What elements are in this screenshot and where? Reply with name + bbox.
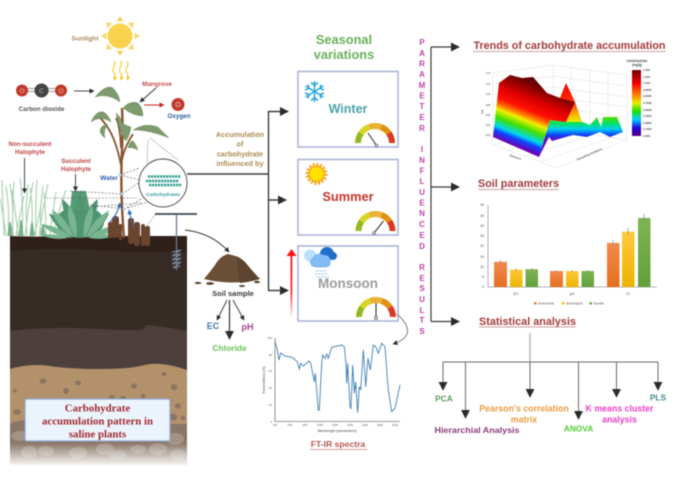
icon: carbon dioxide molecule: C [39, 88, 44, 95]
3D surface chart: 0.8 [486, 103, 490, 107]
surface: low right section [539, 117, 623, 157]
pearson label [479, 404, 569, 424]
title box: Carbohydrate [65, 402, 130, 414]
FT-IR chart: 20 [269, 403, 272, 407]
vertical text: parameter influenced results: A [419, 70, 425, 79]
non-succulent label: Non-succulent [9, 141, 51, 148]
color scale: 0.1400 [643, 127, 652, 131]
FT-IR chart: 800 [303, 423, 308, 427]
vertical text: parameter influenced results: T [420, 316, 425, 325]
stem [98, 108, 133, 238]
seasonal heading: Seasonal [316, 32, 372, 47]
title box: saline plants [69, 428, 126, 440]
vertical text: parameter influenced results: F [420, 166, 425, 176]
mangrove label: Mangrove [142, 81, 172, 88]
bar chart: soil parameters: 5 [482, 275, 484, 279]
3D surface chart: Seasons [509, 153, 522, 161]
legend: Avicennia [538, 302, 554, 306]
3D surface chart: 1.4 [486, 71, 490, 75]
gauge [358, 126, 392, 147]
icon: oxygen atom: O [175, 102, 181, 109]
carbohydrates magnifier: Carbohydrates [146, 192, 180, 198]
k means label [586, 404, 654, 424]
PLS label: PLS [650, 392, 667, 402]
vertical text: parameter influenced results: R [419, 263, 425, 272]
color scale: 0.7000 [643, 101, 652, 105]
seasonal heading: variations [314, 47, 374, 62]
color scale: 0.4200 [643, 114, 652, 118]
color scale: 0.5600 [643, 108, 652, 112]
color scale [627, 59, 652, 138]
3D surface chart: 0.4 [486, 123, 490, 127]
FT-IR chart: 1200 [332, 423, 339, 427]
color scale: 1.100 [643, 81, 650, 85]
icon: soil pile [194, 254, 260, 287]
accumulation label: of [237, 140, 244, 148]
3D surface chart: 0.2 [486, 133, 490, 137]
bar chart: soil parameters: 15 [480, 255, 484, 259]
FT-IR chart: 0 [270, 420, 272, 424]
FT-IR chart: 1800 [377, 423, 384, 427]
non-succulent label [9, 141, 51, 156]
k means label: analysis [602, 414, 637, 424]
tree connectors [443, 333, 658, 419]
vertical text: parameter influenced results: R [419, 124, 425, 133]
panel: monsoon [298, 246, 398, 321]
vertical text: parameter influenced results: N [419, 156, 425, 165]
icon: carbon dioxide molecule: O [19, 88, 25, 95]
arrow: succulent [74, 174, 76, 191]
soil cross-section [10, 233, 187, 467]
vertical text: parameter influenced results: E [419, 231, 425, 240]
legend [534, 302, 604, 306]
carbon dioxide label: Carbon dioxide [19, 106, 65, 113]
vertical text: parameter influenced results: T [420, 102, 425, 111]
connector: to results [431, 47, 459, 322]
FT-IR chart: 80 [269, 353, 272, 357]
vertical text: parameter influenced results: U [419, 295, 425, 304]
EC label: EC [207, 321, 220, 331]
heading: soil parameters: Soil parameters [478, 178, 559, 190]
arrow: oxygen release [144, 104, 164, 106]
heading: trends: Trends of carbohydrate accumulation [474, 40, 666, 52]
color scale: 1.200 [643, 75, 650, 79]
bars [494, 218, 650, 287]
vertical text: parameter influenced results: P [419, 38, 425, 47]
water dots [118, 174, 126, 210]
accumulation label: carbohydrate [217, 150, 263, 158]
legend: Sueda [594, 302, 604, 306]
color scale: 0.9000 [643, 88, 652, 92]
title box [25, 399, 170, 441]
accumulation label: influenced by [216, 159, 264, 168]
vertical text: parameter influenced results: L [420, 306, 425, 315]
error bars [500, 214, 644, 272]
ANOVA label: ANOVA [564, 424, 593, 434]
arrows: water uptake [110, 203, 134, 228]
icon: sun [101, 16, 140, 56]
dashed guide lines [46, 138, 178, 228]
FT-IR chart [262, 336, 400, 433]
icon: oxygen atom [172, 98, 184, 111]
bar chart: soil parameters [480, 203, 657, 306]
bar chart: soil parameters: 25 [480, 234, 484, 238]
k means label: K means cluster [586, 404, 654, 414]
3D surface chart: 1.2 [486, 82, 490, 86]
heading: statistical analysis: Statistical analysis [479, 316, 576, 328]
gauge [358, 214, 392, 234]
FT-IR chart: 1400 [347, 423, 354, 427]
vertical text: parameter influenced results: M [419, 81, 426, 90]
bar chart: soil parameters: pH [569, 292, 575, 296]
bar chart: soil parameters: 0 [482, 285, 484, 289]
accumulation label [216, 130, 264, 168]
succulent label: Halophyte [61, 166, 92, 173]
grass: non-succulent halophyte [0, 178, 66, 236]
hierarchial label: Hierarchial Analysis [434, 425, 520, 435]
FT-IR chart: 400 [273, 423, 278, 427]
vertical text: parameter influenced results: E [419, 92, 425, 100]
panel: winter [298, 72, 398, 147]
monsoon label: Monsoon [318, 276, 378, 291]
FT-IR chart: 60 [269, 369, 272, 373]
seasonal heading [314, 32, 374, 62]
vertical text: parameter influenced results: D [419, 242, 425, 251]
bar chart: soil parameters: Cl [626, 292, 630, 296]
color scale: 0.000 [643, 134, 650, 138]
bar chart: soil parameters: 40 [480, 203, 484, 207]
arrow: carbon dioxide to plant [74, 90, 94, 92]
leaves [91, 87, 169, 150]
pearson label: Pearson's correlation [479, 404, 569, 414]
vertical text: parameter influenced results: E [419, 198, 425, 208]
bar chart: soil parameters: EC [513, 292, 519, 296]
surface: rear spike [560, 83, 582, 122]
vertical text: parameter influenced results [419, 38, 426, 336]
FT-IR chart: Wavelength (nanometers) [318, 429, 356, 433]
vertical text: parameter influenced results: A [419, 49, 425, 58]
FT-IR chart: 100 [267, 336, 272, 340]
icon: soil auger [155, 214, 197, 270]
vertical text: parameter influenced results: U [419, 188, 425, 197]
PCA label: PCA [435, 394, 453, 404]
vertical text: parameter influenced results: E [419, 274, 425, 283]
bar chart: soil parameters: 30 [480, 224, 484, 228]
arrow: rising trend [286, 249, 296, 318]
surface: front sheet [493, 75, 575, 157]
3D surface chart: 1.0 [486, 92, 490, 96]
icon: carbon dioxide molecule: O [58, 88, 64, 95]
gauge [359, 300, 393, 320]
color scale: 0.2800 [643, 121, 652, 125]
water label: Water [100, 175, 118, 182]
icon: sunlight rays [113, 61, 128, 80]
arrows: soil analysis [217, 300, 244, 339]
color scale: 1.400 [643, 68, 650, 72]
icon: rain cloud [304, 247, 337, 277]
vertical text: parameter influenced results: L [420, 177, 425, 186]
vertical text: parameter influenced results: S [419, 284, 425, 293]
soil sample label: Soil sample [212, 289, 254, 298]
icon: snowflake [305, 81, 324, 102]
pearson label: matrix [511, 414, 537, 424]
3D surface chart [480, 59, 652, 168]
vertical text: parameter influenced results: I [421, 145, 423, 154]
succulent halophyte [40, 191, 121, 241]
icon: carbon dioxide molecule [16, 84, 67, 98]
chloride label: Chloride [212, 343, 247, 353]
connector: to seasons [187, 111, 288, 290]
arrow: monsoon to spectra [393, 314, 408, 344]
vertical text: parameter influenced results: S [419, 327, 425, 336]
FT-IR chart: 1600 [362, 423, 369, 427]
arrow: mangrove label to leaf [140, 88, 156, 102]
color scale: Carbohydrate [627, 59, 648, 63]
oxygen label: Oxygen [167, 113, 191, 120]
title box: accumulation pattern in [42, 416, 153, 428]
vertical text: parameter influenced results: R [419, 60, 425, 68]
vertical text: parameter influenced results: N [419, 209, 425, 218]
bar chart: soil parameters: 20 [480, 244, 484, 248]
pH label: pH [242, 322, 254, 332]
arrow: to soil sample [185, 230, 229, 252]
vertical text: parameter influenced results: E [419, 113, 425, 122]
3D surface chart: 0.6 [486, 113, 490, 117]
bar chart: soil parameters: 35 [480, 214, 484, 218]
panel: summer [298, 160, 398, 235]
bar chart: soil parameters: 10 [480, 265, 484, 269]
summer label: Summer [322, 189, 374, 204]
accumulation label: Accumulation [216, 130, 264, 139]
winter label: Winter [329, 102, 368, 116]
FT-IR chart: 600 [288, 423, 293, 427]
non-succulent label: Halophyte [15, 149, 46, 156]
color scale: (mg/g) [632, 63, 642, 67]
3D surface chart: mg [480, 110, 484, 114]
legend: Aeluropus [566, 302, 583, 306]
sunlight label: Sunlight [71, 36, 99, 42]
mangrove plant [91, 87, 169, 246]
3D surface chart: Sampling locations [576, 147, 603, 162]
FT-IR chart: Transmittance (%) [262, 366, 266, 394]
icon: sun [307, 164, 326, 184]
FT-IR chart: 40 [269, 386, 272, 390]
carbohydrates magnifier [139, 159, 187, 207]
FT-IR label: FT-IR spectra [311, 439, 365, 449]
vertical text: parameter influenced results: C [419, 220, 425, 229]
color scale: 0.8400 [643, 94, 652, 98]
FT-IR chart: 2000 [392, 423, 399, 427]
roots [108, 216, 150, 246]
arrow: non-succulent [24, 158, 26, 193]
FT-IR chart: 1000 [317, 423, 324, 427]
succulent label [61, 158, 92, 173]
succulent label: Succulent [61, 158, 91, 165]
